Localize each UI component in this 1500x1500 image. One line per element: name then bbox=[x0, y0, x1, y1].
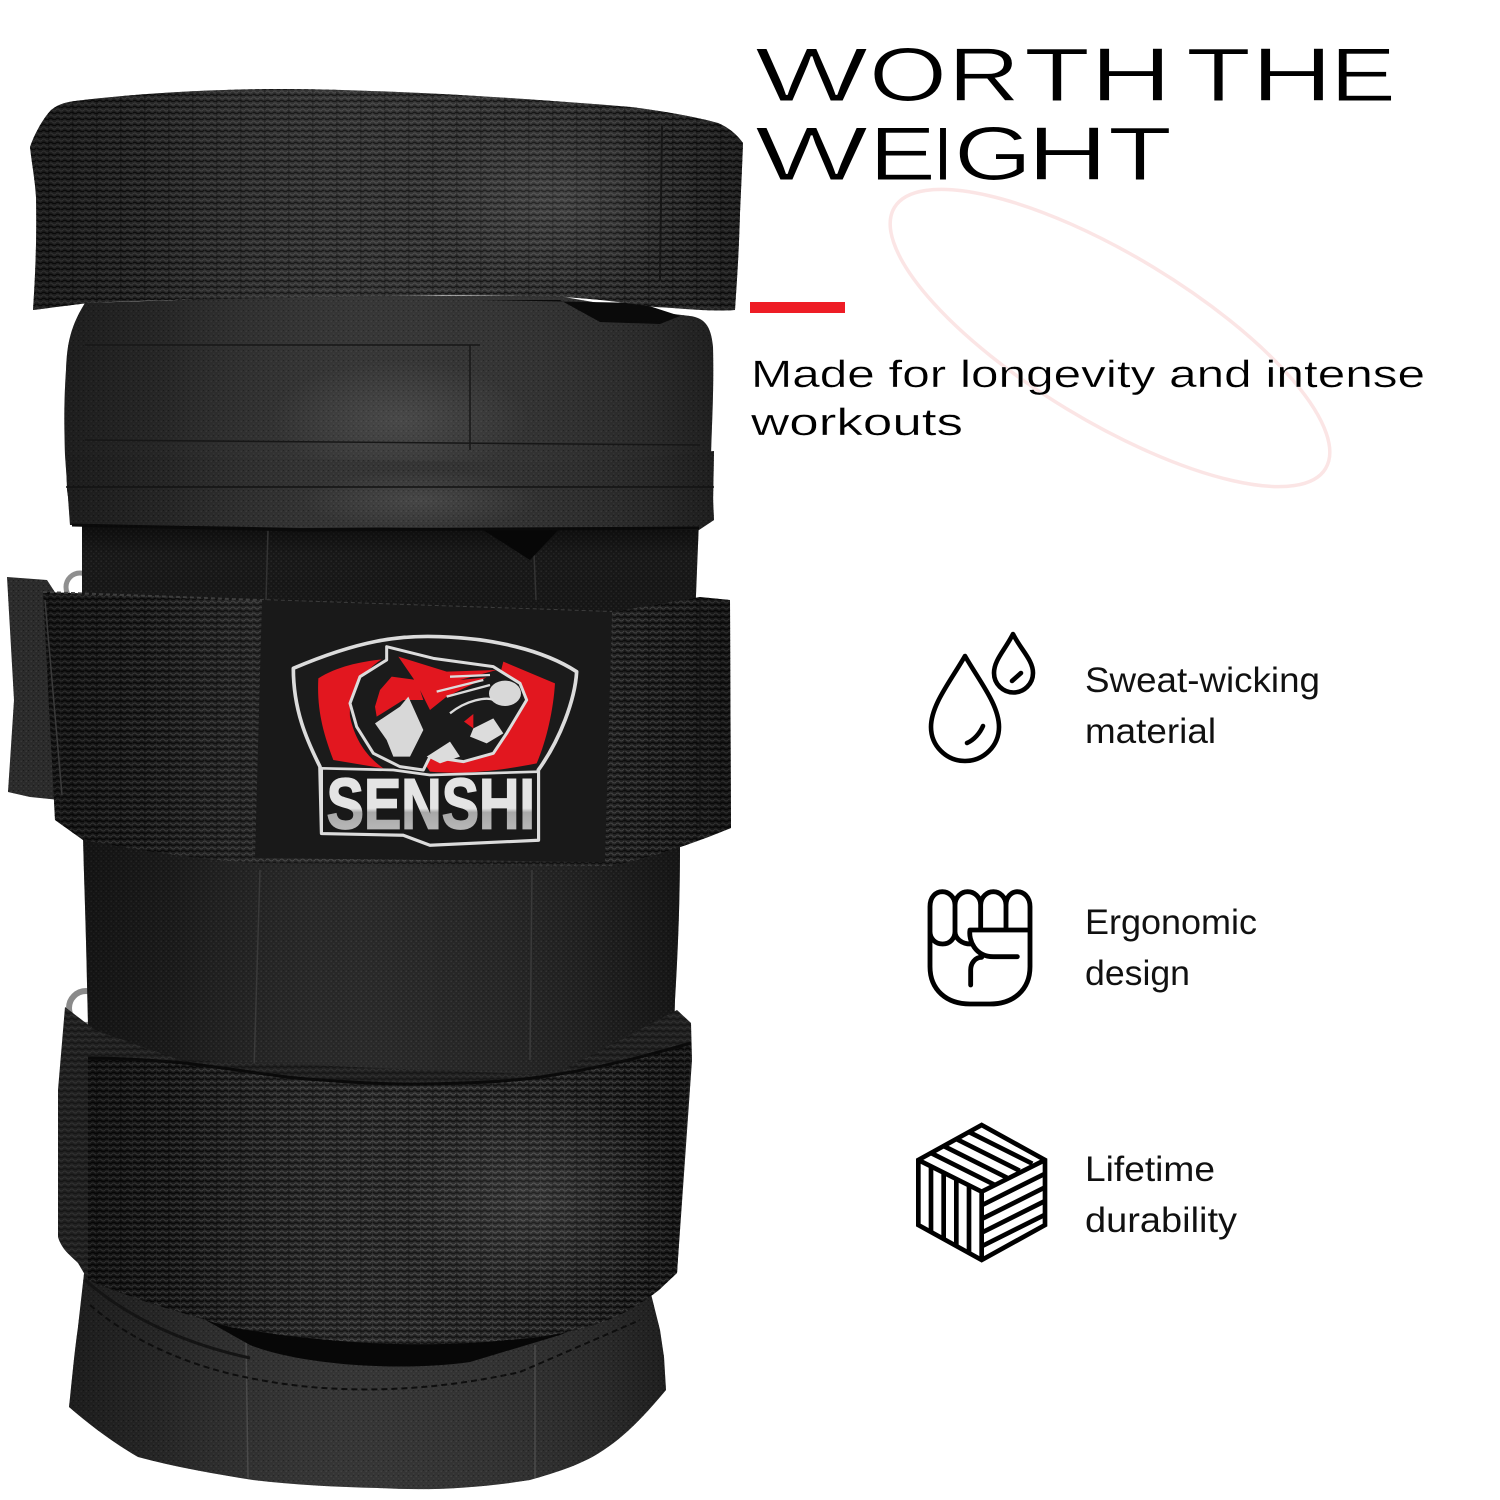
title: H bbox=[1027, 112, 1108, 197]
teeth bbox=[427, 718, 503, 763]
whisker lines bbox=[437, 675, 493, 713]
wordmark box bbox=[322, 768, 538, 845]
title: T bbox=[1108, 112, 1172, 197]
title: H bbox=[1090, 33, 1172, 118]
decorative pink ellipse bbox=[851, 136, 1369, 540]
nose bbox=[489, 681, 521, 706]
forehead stripes bbox=[375, 657, 497, 717]
red accent bar bbox=[750, 302, 845, 313]
white cheek bbox=[375, 697, 423, 757]
title: H bbox=[1251, 33, 1333, 118]
under strap flap bbox=[58, 1007, 692, 1280]
feature text: lifetime: durability bbox=[1085, 1201, 1238, 1240]
title: E bbox=[1330, 33, 1396, 118]
bottom cap bbox=[69, 1265, 666, 1489]
feature text: sweat-wicking: Sweat-wicking bbox=[1085, 661, 1320, 700]
feature text: sweat-wicking: material bbox=[1085, 712, 1216, 751]
logo patch bbox=[255, 600, 612, 862]
mid section bbox=[64, 296, 714, 530]
title: I bbox=[932, 112, 954, 197]
feature text: lifetime bbox=[1085, 1150, 1238, 1240]
bag middle section 3 bbox=[82, 520, 699, 620]
eye bbox=[464, 714, 473, 728]
title: O bbox=[869, 33, 947, 118]
title: G bbox=[954, 112, 1032, 197]
metal ring bottom bbox=[69, 991, 103, 1025]
metal ring top bbox=[66, 573, 94, 601]
logo strap bbox=[43, 592, 731, 866]
feature text: ergonomic: design bbox=[1085, 954, 1190, 993]
subtitle: workouts bbox=[750, 402, 963, 444]
feature text: lifetime: Lifetime bbox=[1085, 1150, 1215, 1189]
wordmark: SENSHI bbox=[327, 764, 535, 844]
icon: water drops bbox=[931, 634, 1033, 761]
title: R bbox=[948, 33, 1020, 118]
subtitle: Made for longevity and intense bbox=[751, 354, 1425, 396]
feature text: ergonomic bbox=[1085, 903, 1257, 993]
top band bbox=[30, 89, 743, 311]
title: T bbox=[1024, 33, 1090, 118]
icon: fist bbox=[930, 892, 1030, 1004]
Senshi logo bbox=[293, 636, 577, 845]
icon: striped cube bbox=[918, 1125, 1045, 1260]
side flap bbox=[7, 577, 60, 800]
lower strap bbox=[88, 1043, 691, 1344]
title: W bbox=[755, 33, 868, 118]
product photo: weighted sandbag bbox=[7, 89, 743, 1489]
mid band bbox=[66, 451, 714, 530]
bag section 4 bbox=[83, 835, 680, 1110]
title: W bbox=[755, 112, 868, 197]
red field right bbox=[420, 662, 555, 773]
red field left bbox=[318, 659, 383, 768]
tiger head bbox=[350, 647, 527, 770]
title: E bbox=[869, 112, 936, 197]
shield bbox=[293, 636, 577, 845]
feature text: sweat-wicking bbox=[1085, 661, 1320, 751]
subtitle bbox=[750, 354, 1425, 444]
title bbox=[755, 33, 1396, 197]
title: T bbox=[1186, 33, 1251, 118]
feature text: ergonomic: Ergonomic bbox=[1085, 903, 1257, 942]
